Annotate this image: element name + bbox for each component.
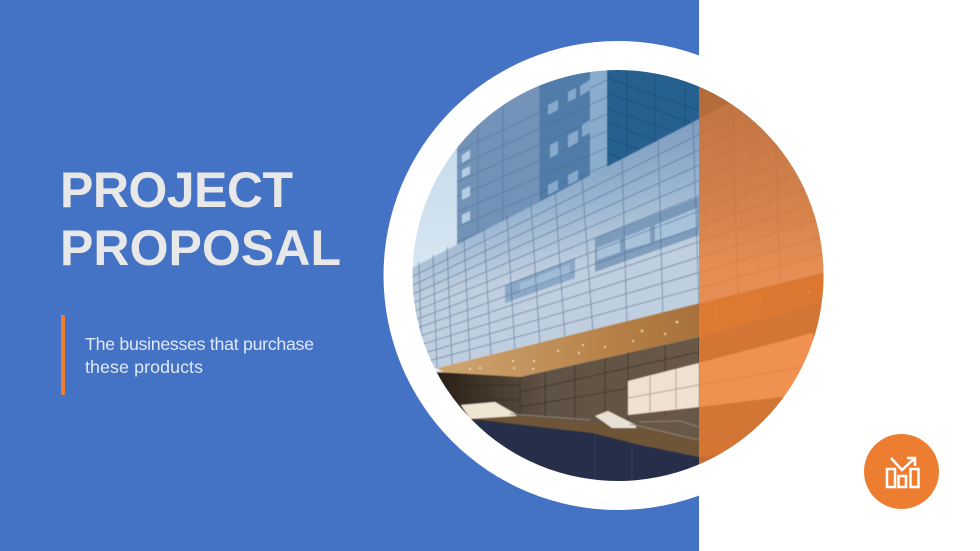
darker and lighter window bands on glass [595,197,699,272]
photo: glass office building in circle [412,70,824,481]
accent bar [61,315,65,395]
subtitle [85,334,314,377]
plaza ramp and stairs [478,415,699,456]
title: PROPOSAL [60,220,341,276]
ceiling lights [469,291,810,370]
subtitle: these products [85,357,203,377]
title [60,162,341,276]
shading on upper orange overlay [699,86,820,238]
bright lobby window [628,333,813,415]
floor and column grid [412,120,822,368]
orange translucent overlay [699,86,824,464]
title: PROJECT [60,162,293,218]
lobby glass wall [436,300,822,458]
icon: orange circle with bar chart and arrow [864,434,939,509]
blue background panel [0,0,699,551]
white circle ring [384,41,852,510]
upper tower faces [456,85,540,245]
lower glass block [412,103,809,368]
canopy ceiling [437,271,830,377]
subtitle: The businesses that purchase [85,334,314,354]
